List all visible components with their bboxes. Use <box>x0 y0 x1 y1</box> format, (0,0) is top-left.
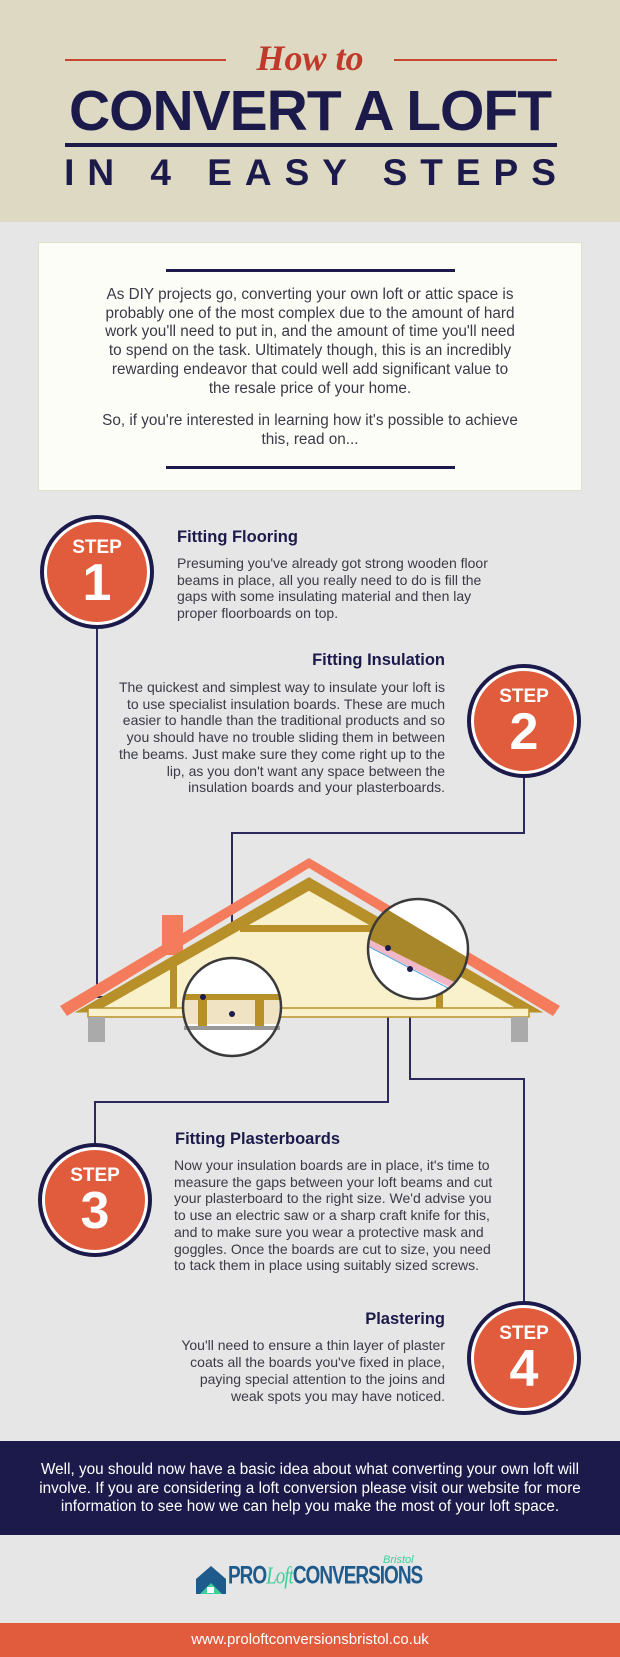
intro text: As DIY projects go, converting your own loft or attic space is <box>106 286 513 303</box>
step 4 heading: Plastering <box>365 1310 445 1328</box>
step 2 text: lip, as you don't want any space between the <box>167 763 445 779</box>
step 1 circle: STEP <box>72 537 122 558</box>
step 4 circle: 4 <box>510 1340 538 1398</box>
step 3 text: to use an electric saw or a sharp craft knife for this, <box>174 1207 490 1223</box>
intro text: work you'll need to put in, and the amount of time you'll need <box>105 323 515 340</box>
step 2 heading: Fitting Insulation <box>312 651 445 669</box>
step 1 text: Presuming you've already got strong wooden floor <box>177 555 488 571</box>
logo <box>196 1554 422 1594</box>
step 1 text: proper floorboards on top. <box>177 605 338 621</box>
intro text: So, if you're interested in learning how it's possible to achieve <box>102 412 518 429</box>
step 3 circle: STEP <box>70 1165 120 1186</box>
step 3 circle: 3 <box>81 1182 109 1240</box>
footer conclusion <box>0 1441 620 1535</box>
subtitle: IN 4 EASY STEPS <box>64 152 569 193</box>
step 2 text: to use specialist insulation boards. These are much <box>127 696 445 712</box>
step 2 text: The quickest and simplest way to insulate your loft is <box>119 679 445 695</box>
step 2 <box>119 651 581 795</box>
step 1 circle <box>44 519 150 625</box>
step 3 circle <box>42 1147 148 1253</box>
step 2 text: easier to handle than the traditional products and so <box>123 712 445 728</box>
step 1 <box>40 515 488 629</box>
step 3 text <box>174 1157 492 1273</box>
connector lines and house <box>60 628 560 1302</box>
step 4 text: paying special attention to the joins and <box>200 1371 445 1387</box>
main title: CONVERT A LOFT <box>69 79 551 143</box>
step 4 text: coats all the boards you've fixed in place, <box>190 1354 445 1370</box>
step 1 heading: Fitting Flooring <box>177 528 298 546</box>
intro text: the resale price of your home. <box>209 380 411 397</box>
step 3 text: to tack them in place using suitably sized screws. <box>174 1257 479 1273</box>
step 3 text: Now your insulation boards are in place, it's time to <box>174 1157 490 1173</box>
step 4 text <box>181 1337 445 1404</box>
step 1 text: beams in place, all you really need to do is fill the <box>177 572 481 588</box>
house illustration <box>60 858 560 1042</box>
step 3 text: and to make sure you wear a protective mask and <box>174 1224 484 1240</box>
step 2 circle: 2 <box>510 703 538 761</box>
url bar: www.proloftconversionsbristol.co.uk <box>191 1631 429 1648</box>
step 4 circle <box>471 1305 577 1411</box>
step 2 text: you should have no trouble sliding them in between <box>127 729 445 745</box>
step 2 circle: STEP <box>499 686 549 707</box>
footer conclusion: Well, you should now have a basic idea about what converting your own loft will <box>41 1461 579 1478</box>
url bar <box>0 1623 620 1657</box>
step 3 <box>38 1130 492 1273</box>
intro text <box>102 286 518 448</box>
logo: PROLoftCONVERSIONS <box>228 1563 422 1590</box>
header <box>0 0 620 222</box>
step 1 text: gaps with some insulating material and then lay <box>177 588 471 604</box>
intro text: rewarding endeavor that could well add significant value to <box>112 361 508 378</box>
step 1 circle: 1 <box>83 554 111 612</box>
step 3 text: goggles. Once the boards are cut to size, you need <box>174 1241 491 1257</box>
step 4 <box>181 1301 581 1415</box>
step 4 text: You'll need to ensure a thin layer of plaster <box>181 1337 445 1353</box>
step 2 text: the beams. Just make sure they come right up to the <box>119 746 445 762</box>
step 2 text <box>119 679 445 795</box>
intro text: this, read on... <box>262 431 358 448</box>
step 3 text: measure the gaps between your loft beams and cut <box>174 1174 492 1190</box>
footer conclusion: information to see how we can help you make the most of your loft space. <box>61 1498 559 1515</box>
icon: house <box>196 1566 226 1594</box>
footer conclusion: involve. If you are considering a loft conversion please visit our website for more <box>39 1480 581 1496</box>
step 2 text: insulation boards and your plasterboards. <box>188 779 445 795</box>
step 4 text: weak spots you may have noticed. <box>231 1388 445 1404</box>
intro text: to spend on the task. Ultimately though, this is an incredibly <box>109 342 511 359</box>
logo: Bristol <box>383 1554 414 1566</box>
step 2 circle <box>471 668 577 774</box>
intro panel <box>38 242 582 491</box>
step 4 circle: STEP <box>499 1323 549 1344</box>
intro text: probably one of the most complex due to the amount of hard <box>105 305 515 322</box>
step 1 text <box>177 555 488 621</box>
zoom circle: flooring <box>183 958 281 1056</box>
step 3 text: your plasterboard to the right size. We'd advise you <box>174 1190 492 1206</box>
step 3 heading: Fitting Plasterboards <box>175 1130 340 1148</box>
how to heading: How to <box>256 38 364 78</box>
zoom circle: roof <box>366 898 470 1000</box>
